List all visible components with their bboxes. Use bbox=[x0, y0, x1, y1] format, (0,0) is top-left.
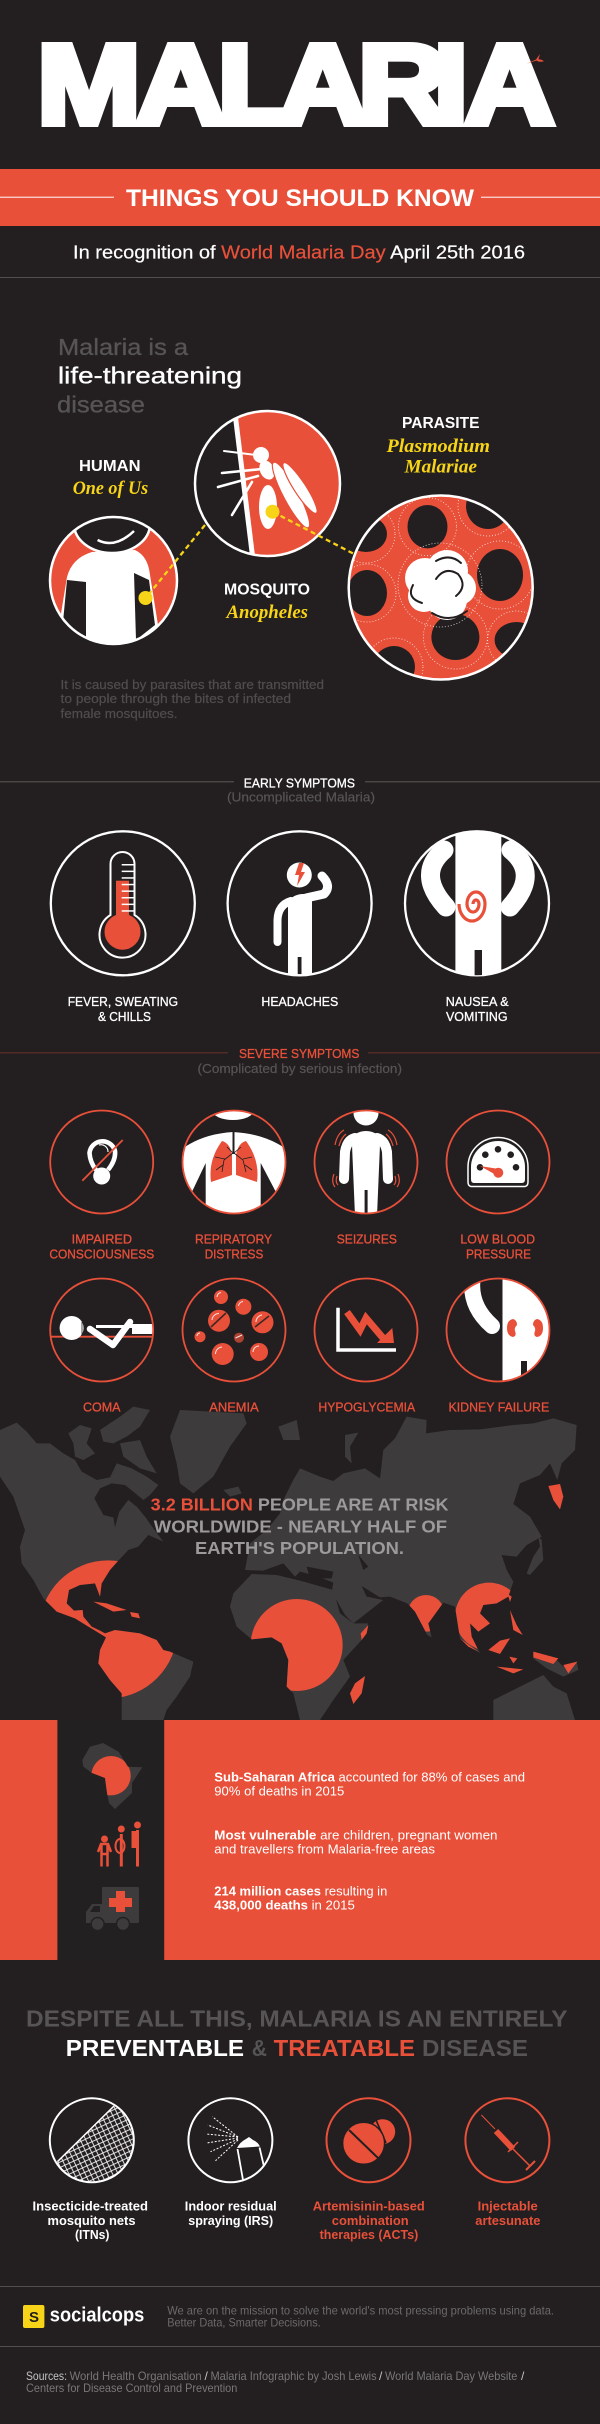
text: most vulnerable: and travellers from Malaria-free areas bbox=[214, 1842, 436, 1857]
map: world malaria risk bbox=[0, 1407, 578, 1720]
icon: parasite circle bbox=[347, 494, 534, 681]
panel: parasite bbox=[347, 417, 534, 681]
arrow: dashed transmission lines bbox=[149, 512, 356, 594]
banner: things you should know: THINGS YOU SHOULD KNOW bbox=[126, 185, 474, 212]
icon: kidneys bbox=[446, 1275, 552, 1385]
label: (ITNs) bbox=[75, 2227, 110, 2242]
text: sources bbox=[26, 2369, 525, 2395]
label: therapies (ACTs) bbox=[320, 2227, 418, 2242]
label: HYPOGLYCEMIA bbox=[318, 1399, 416, 1414]
text: cases and deaths bbox=[214, 1884, 387, 1913]
label: COMA bbox=[83, 1399, 121, 1414]
label: fever: FEVER, SWEATING bbox=[68, 994, 178, 1009]
text: sources: World Malaria Day Website bbox=[385, 2369, 518, 2383]
panel: nausea bbox=[405, 828, 549, 1024]
label: fever: & CHILLS bbox=[98, 1009, 151, 1024]
icon: lying person bbox=[50, 1278, 156, 1382]
panel: residual spraying bbox=[185, 2098, 277, 2228]
map: eastern hemisphere bbox=[230, 1417, 578, 1720]
label: mosquito: MOSQUITO bbox=[224, 582, 310, 599]
text: sources: Malaria Infographic by Josh Lewis bbox=[210, 2369, 377, 2383]
icon: lungs bbox=[182, 1110, 286, 1214]
icon: falling chart bbox=[314, 1278, 418, 1382]
icon: small mosquito on title bbox=[527, 54, 544, 64]
label: plasmodium malariae bbox=[385, 436, 490, 478]
label: one of us: One of Us bbox=[73, 478, 148, 499]
label: artesunate bbox=[475, 2213, 540, 2228]
label: nausea: VOMITING bbox=[446, 1009, 508, 1024]
panel: impaired consciousness bbox=[49, 1110, 154, 1261]
text: sub-saharan africa: Sub-Saharan Africa accounted for 88% of cases and bbox=[214, 1770, 525, 1785]
heading: preventable and treatable: & bbox=[252, 2035, 267, 2061]
label: spraying (IRS) bbox=[188, 2213, 273, 2228]
icon: blood cells bbox=[182, 1278, 286, 1382]
heading: preventable and treatable: DESPITE ALL THIS, MALARIA IS AN ENTIRELY bbox=[26, 2006, 568, 2032]
text: sub-saharan africa bbox=[214, 1770, 525, 1799]
map: western hemisphere bbox=[0, 1407, 300, 1720]
panel: mosquito nets bbox=[32, 2098, 148, 2242]
label: IMPAIRED bbox=[72, 1231, 132, 1246]
panel: human bbox=[50, 458, 177, 650]
sidebar column bbox=[57, 1720, 164, 1960]
text: mission statement bbox=[167, 2304, 554, 2330]
panel: low blood pressure bbox=[446, 1110, 550, 1261]
label bbox=[313, 2199, 425, 2242]
heading: severe symptoms: (Complicated by serious infection) bbox=[198, 1061, 402, 1076]
icon: ambulance bbox=[86, 1887, 139, 1930]
label: CONSCIOUSNESS bbox=[49, 1246, 154, 1261]
icon: mosquito circle bbox=[195, 405, 350, 560]
panel: headaches bbox=[228, 831, 372, 1009]
label: KIDNEY FAILURE bbox=[448, 1399, 550, 1414]
label: mosquito nets bbox=[48, 2213, 136, 2228]
heading: early symptoms: EARLY SYMPTOMS bbox=[244, 776, 355, 790]
text: sources: Centers for Disease Control and Prevention bbox=[26, 2381, 237, 2395]
heading: preventable and treatable: PREVENTABLE bbox=[66, 2035, 244, 2061]
label: anopheles: Anopheles bbox=[226, 602, 308, 623]
text: 3.2 billion at risk: 3.2 BILLION PEOPLE ARE AT RISK bbox=[151, 1495, 449, 1515]
label: Artemisinin-based bbox=[313, 2199, 425, 2214]
label: LOW BLOOD bbox=[460, 1231, 535, 1246]
label: headaches: HEADACHES bbox=[261, 994, 339, 1009]
text: sources: / bbox=[204, 2369, 208, 2383]
text: caused by parasites bbox=[60, 677, 324, 721]
heading: malaria is a life-threatening disease: Malaria is a bbox=[58, 334, 189, 360]
title: MALARIA bbox=[37, 22, 555, 148]
text: sources: / bbox=[379, 2369, 383, 2383]
icon: thermometer bbox=[51, 831, 195, 975]
panel: statistics band bbox=[0, 1720, 600, 1960]
banner: things you should know bbox=[0, 169, 600, 226]
icon: vulnerable people bbox=[98, 1822, 141, 1866]
heading: severe symptoms: SEVERE SYMPTOMS bbox=[239, 1047, 359, 1061]
text: caused by parasites: female mosquitoes. bbox=[60, 706, 178, 721]
text: mission statement: We are on the mission to solve the world's most pressing problems using data. bbox=[167, 2304, 554, 2318]
text: 3.2 billion at risk: EARTH'S POPULATION. bbox=[195, 1538, 404, 1558]
logo: socialcops bbox=[23, 2305, 144, 2328]
panel: hypoglycemia bbox=[314, 1278, 418, 1414]
label: Injectable bbox=[478, 2199, 538, 2214]
label bbox=[185, 2199, 277, 2228]
label: ANEMIA bbox=[209, 1399, 259, 1414]
icon: nausea body with spiral bbox=[405, 828, 549, 980]
label: DISTRESS bbox=[205, 1246, 264, 1261]
label: SEIZURES bbox=[337, 1231, 397, 1246]
icon: pills bbox=[326, 2098, 410, 2182]
text: sub-saharan africa: 90% of deaths in 2015 bbox=[214, 1784, 344, 1799]
label: human: HUMAN bbox=[79, 458, 140, 475]
text: caused by parasites: to people through the bites of infected bbox=[60, 691, 291, 706]
panel: fever bbox=[51, 831, 195, 1024]
heading: preventable and treatable: TREATABLE bbox=[274, 2035, 415, 2061]
text: most vulnerable: Most vulnerable are children, pregnant women bbox=[214, 1828, 498, 1843]
label bbox=[195, 1231, 272, 1261]
icon: net bbox=[50, 2098, 140, 2190]
icon: spray can bbox=[188, 2098, 272, 2182]
text: sources: World Health Organisation bbox=[70, 2369, 202, 2383]
label: combination bbox=[332, 2213, 409, 2228]
heading: severe symptoms bbox=[0, 1047, 600, 1076]
heading: early symptoms bbox=[0, 776, 600, 805]
label: fever bbox=[68, 994, 178, 1024]
label: plasmodium malariae: Malariae bbox=[403, 457, 478, 478]
text: 3.2 billion at risk: WORLDWIDE - NEARLY HALF OF bbox=[154, 1517, 447, 1537]
label: Insecticide-treated bbox=[32, 2199, 148, 2214]
icon: headache person bbox=[228, 831, 372, 980]
heading: preventable and treatable bbox=[26, 2006, 568, 2061]
panel: anemia bbox=[182, 1278, 286, 1414]
icon: seizing person bbox=[314, 1100, 418, 1216]
heading: early symptoms: (Uncomplicated Malaria) bbox=[227, 790, 375, 805]
subtitle: In recognition of World Malaria Day April 25th 2016 bbox=[73, 243, 525, 263]
text: cases and deaths: 438,000 deaths in 2015 bbox=[214, 1898, 355, 1913]
text: most vulnerable bbox=[214, 1828, 498, 1857]
icon: syringe bbox=[465, 2098, 549, 2182]
heading: malaria is a life-threatening disease: life-threatening bbox=[58, 362, 242, 388]
label bbox=[460, 1231, 535, 1261]
text: cases and deaths: 214 million cases resulting in bbox=[214, 1884, 387, 1899]
label: PRESSURE bbox=[466, 1246, 531, 1261]
logo: socialcops: socialcops bbox=[50, 2305, 144, 2327]
icon: gauge bbox=[446, 1110, 550, 1214]
text: 3.2 billion at risk bbox=[151, 1495, 449, 1558]
label bbox=[32, 2199, 148, 2242]
text: sources: / bbox=[521, 2369, 525, 2383]
icon: human circle bbox=[48, 516, 178, 646]
text: mission statement: Better Data, Smarter Decisions. bbox=[167, 2316, 321, 2330]
panel: injectable artesunate bbox=[465, 2098, 549, 2228]
icon: africa bbox=[82, 1743, 142, 1809]
icon: bulb bbox=[50, 1110, 153, 1214]
label: parasite: PARASITE bbox=[402, 415, 480, 432]
label: REPIRATORY bbox=[195, 1231, 272, 1246]
heading: preventable and treatable: DISEASE bbox=[422, 2035, 528, 2061]
panel: kidney failure bbox=[446, 1275, 552, 1414]
label: nausea: NAUSEA & bbox=[446, 994, 509, 1009]
panel: combination therapies bbox=[313, 2098, 425, 2242]
logo: socialcops: S bbox=[29, 2309, 39, 2326]
panel: seizures bbox=[314, 1100, 418, 1246]
panel: respiratory distress bbox=[182, 1110, 286, 1259]
panel: mosquito bbox=[195, 405, 350, 623]
text: caused by parasites: It is caused by parasites that are transmitted bbox=[60, 677, 324, 692]
panel: coma bbox=[50, 1278, 156, 1414]
label: plasmodium malariae: Plasmodium bbox=[385, 436, 490, 457]
label: Indoor residual bbox=[185, 2199, 277, 2214]
label bbox=[475, 2199, 540, 2228]
label: nausea bbox=[446, 994, 509, 1024]
heading: malaria is a life-threatening disease bbox=[57, 334, 242, 418]
text: sources: Sources: bbox=[26, 2369, 67, 2383]
label bbox=[49, 1231, 154, 1261]
heading: malaria is a life-threatening disease: disease bbox=[57, 392, 145, 418]
